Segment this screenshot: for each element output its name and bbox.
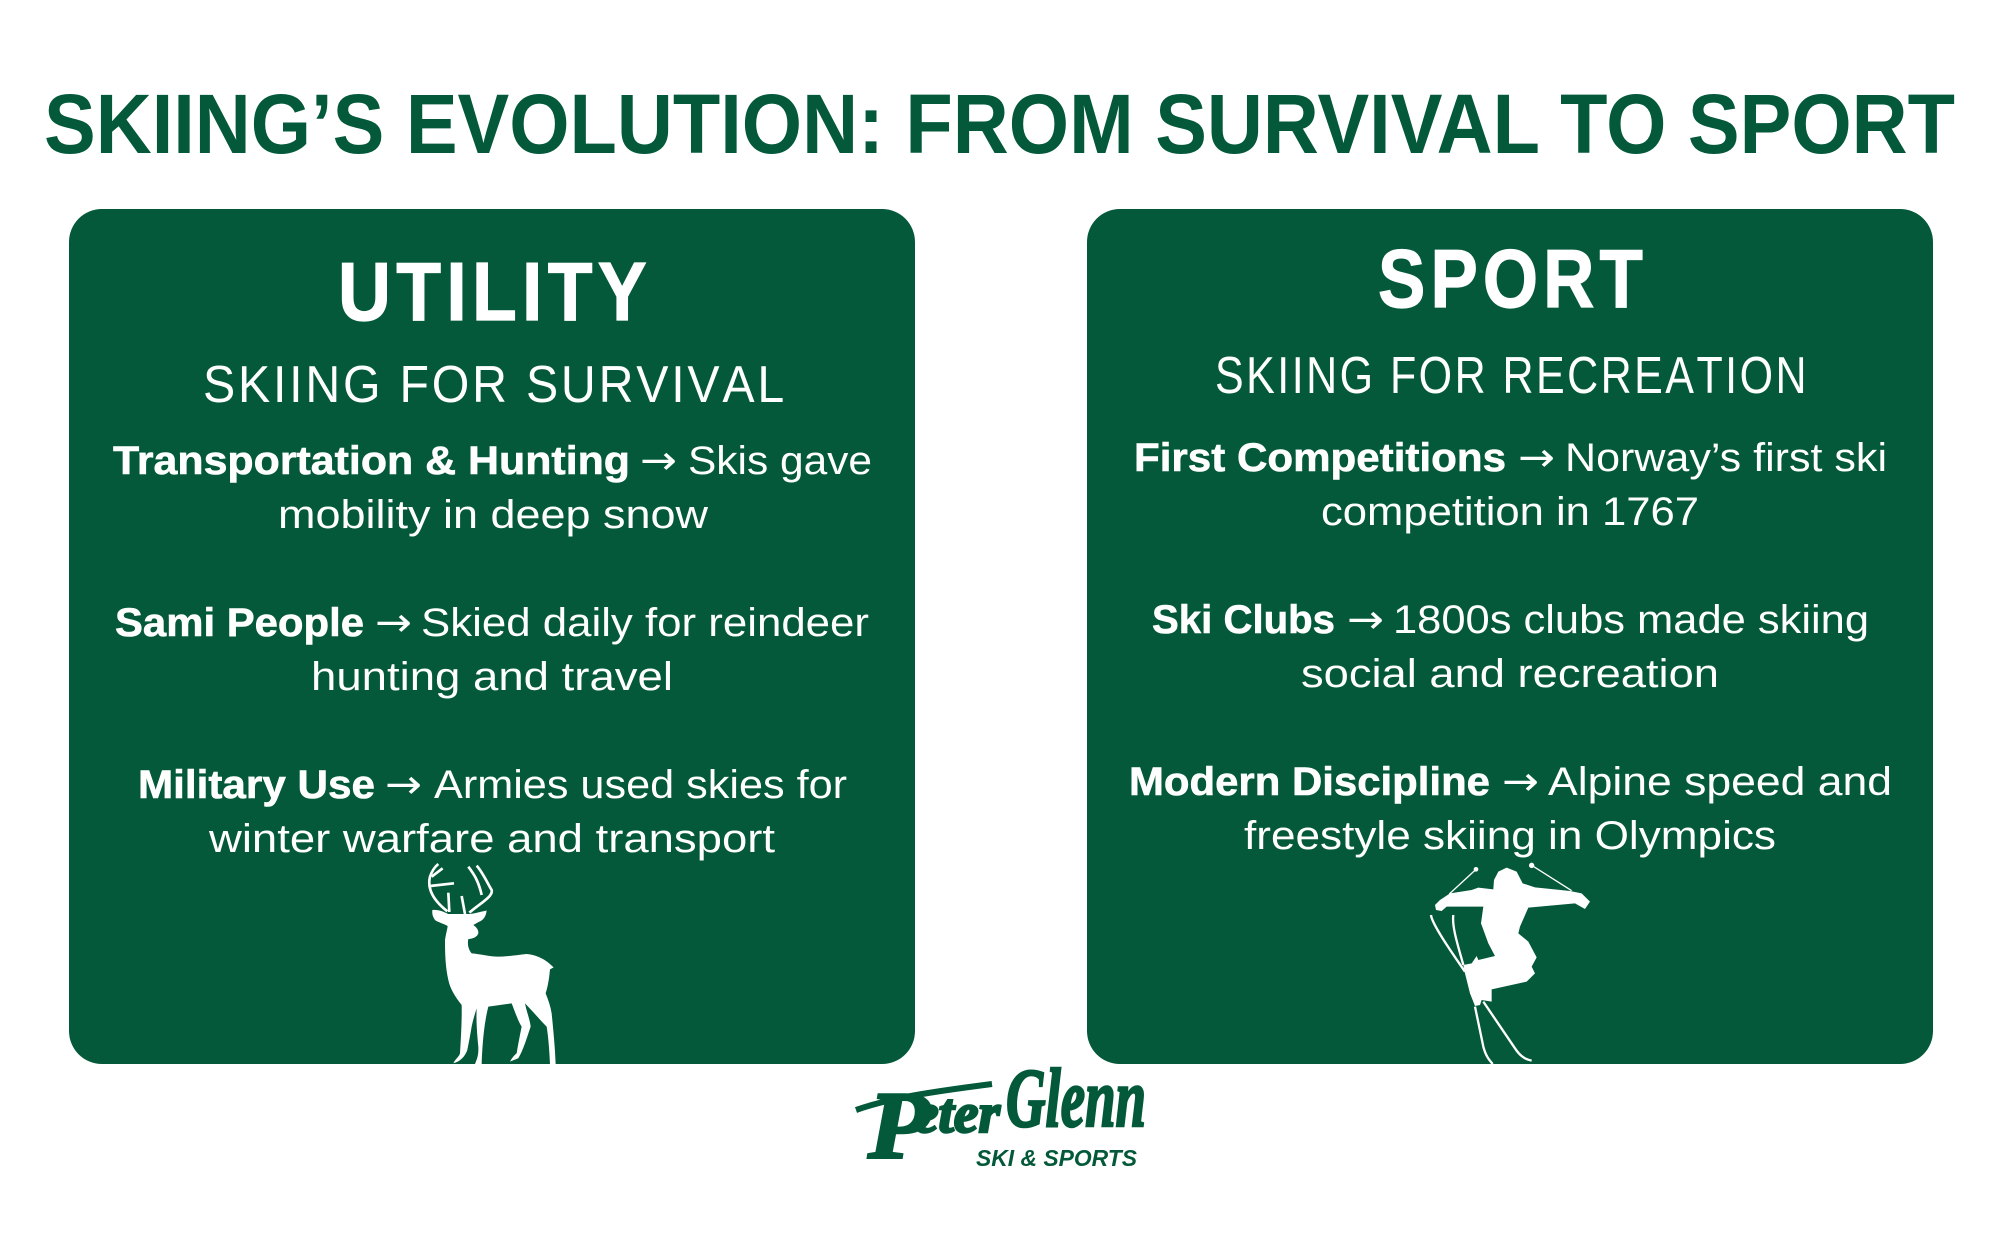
- text block: sami people: Sami People: [115, 601, 364, 645]
- text block: modern discipline: [1129, 759, 1892, 858]
- heading: utility: UTILITY: [338, 245, 652, 338]
- panel: utility: [69, 209, 915, 1064]
- text block: transportation and hunting: Skis gave: [688, 439, 872, 483]
- logo wordmark: Peter Glenn: eter: [914, 1083, 1001, 1145]
- logo tagline: ski & sports: SKI & SPORTS: [976, 1145, 1138, 1171]
- text block: first competitions: competition in 1767: [1321, 490, 1699, 534]
- text block: sami people: →: [375, 600, 412, 646]
- text block: ski clubs: 1800s clubs made skiing: [1393, 598, 1869, 642]
- logo wordmark: Peter Glenn: Glenn: [1006, 1052, 1146, 1145]
- text block: first competitions: →: [1518, 435, 1555, 481]
- text block: sami people: Skied daily for reindeer: [421, 601, 869, 645]
- heading: sport: SPORT: [1378, 232, 1648, 325]
- text block: military use: Military Use: [138, 763, 375, 807]
- text block: first competitions: [1134, 435, 1887, 534]
- text block: ski clubs: Ski Clubs: [1152, 598, 1335, 642]
- text block: first competitions: First Competitions: [1134, 436, 1506, 480]
- text block: first competitions: Norway’s first ski: [1565, 436, 1887, 480]
- text block: military use: Armies used skies for: [434, 763, 847, 807]
- text block: sami people: hunting and travel: [311, 655, 673, 699]
- logo wordmark: Peter Glenn: P: [867, 1072, 931, 1179]
- panel: sport: [1087, 209, 1933, 1064]
- text block: ski clubs: [1152, 597, 1869, 696]
- logo wordmark: Peter Glenn: [856, 1052, 1146, 1179]
- text block: transportation and hunting: mobility in deep snow: [278, 493, 708, 537]
- text block: transportation and hunting: [113, 438, 872, 537]
- text block: modern discipline: Alpine speed and: [1548, 760, 1892, 804]
- text block: sami people: [115, 600, 869, 699]
- text block: transportation and hunting: →: [640, 438, 677, 484]
- text block: military use: →: [385, 762, 422, 808]
- text block: ski clubs: →: [1347, 597, 1384, 643]
- text block: ski clubs: social and recreation: [1301, 652, 1719, 696]
- text block: military use: [138, 762, 847, 861]
- subheading: skiing for recreation: SKIING FOR RECREATION: [1215, 347, 1809, 405]
- logo: Peter Glenn Ski & Sports: [856, 1052, 1146, 1179]
- icon: deer silhouette: [429, 864, 556, 1064]
- text block: military use: winter warfare and transport: [208, 817, 775, 861]
- text block: modern discipline: freestyle skiing in Olympics: [1244, 814, 1776, 858]
- text block: modern discipline: →: [1502, 759, 1539, 805]
- text block: modern discipline: Modern Discipline: [1129, 760, 1490, 804]
- subheading: skiing for survival: SKIING FOR SURVIVAL: [203, 356, 787, 414]
- icon: freestyle skier silhouette: [1431, 863, 1590, 1064]
- text block: transportation and hunting: Transportation & Hunting: [113, 439, 630, 483]
